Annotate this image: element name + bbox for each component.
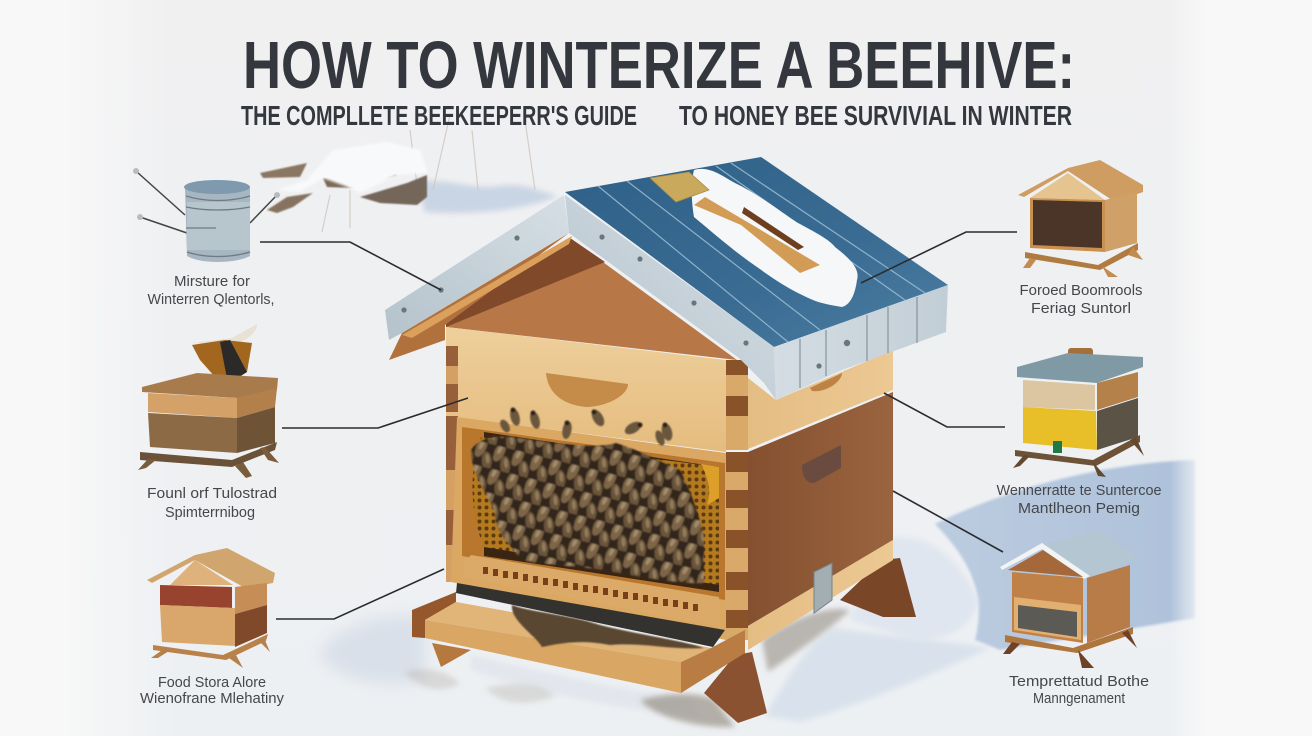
right front leg: [704, 652, 767, 723]
main beehive illustration: [385, 157, 948, 723]
subtitle: THE COMPLLETE BEEKEEPERR'S GUIDE: [241, 100, 637, 131]
icon: top right hive: [1018, 160, 1143, 277]
landing board left edge: [412, 592, 456, 638]
subtitle: [241, 100, 1072, 131]
snow debris around the hive: [405, 609, 850, 727]
label: temperature: [996, 483, 1162, 517]
icon: small hive red band: [147, 548, 275, 668]
label: management: Temprettatud Bothe: [1009, 674, 1149, 690]
label: food storage: Food Stora Alore: [158, 675, 266, 691]
snow on roof: [692, 169, 858, 307]
ridge metal strip: [565, 195, 776, 400]
side lower brown box: [748, 392, 893, 626]
label: temperature: Wennerratte te Suntercoe: [996, 483, 1162, 499]
label: temperature: Mantlheon Pemig: [1018, 501, 1140, 517]
label: top right: Feriag Suntorl: [1031, 301, 1131, 317]
wood soffit: [389, 233, 569, 360]
label: food: [147, 486, 277, 521]
upper front box: [446, 327, 726, 452]
icon: metal can with wires: [133, 168, 280, 262]
side upper pine box: [748, 350, 893, 449]
gable shadow: [446, 238, 605, 327]
label: moisture: Winterren Qlentorls,: [148, 292, 274, 308]
icon: blue roof hive: [1000, 530, 1138, 668]
bee cluster: [471, 407, 704, 583]
left front leg: [432, 643, 471, 667]
frame around opening: [451, 417, 726, 640]
honeycomb: [472, 437, 719, 585]
golden honey patch: [701, 464, 719, 505]
subtitle: TO HONEY BEE SURVIVIAL IN WINTER: [679, 100, 1072, 131]
front hand-hold: [546, 373, 628, 407]
label: management: [1009, 674, 1149, 707]
roof fascia: [774, 285, 948, 400]
entrance reducer dark bar: [456, 583, 725, 647]
title: HOW TO WINTERIZE A BEEHIVE:: [243, 28, 1075, 103]
bees at top of opening: [498, 407, 674, 447]
label: food: Spimterrnibog: [165, 505, 255, 521]
leader lines: [260, 232, 1017, 619]
side bottom pine strip: [748, 540, 893, 650]
landing board front: [425, 620, 681, 693]
wooden feeder bar: [694, 197, 820, 273]
left corner joints: [446, 346, 458, 545]
side hand-hold upper: [810, 373, 842, 391]
rear leg: [840, 558, 916, 617]
landing board top: [425, 602, 711, 662]
side hand-hold lower: [802, 445, 841, 483]
label: management: Manngenament: [1033, 691, 1125, 707]
dark slot in snow: [742, 207, 804, 250]
left roof metal: [385, 195, 569, 340]
label: top right: [1020, 283, 1142, 317]
label: food: Founl orf Tulostrad: [147, 486, 277, 502]
metal latch: [814, 563, 832, 613]
label: top right: Foroed Boomrools: [1020, 283, 1142, 299]
wooden cover block: [650, 172, 709, 202]
roof screws: [401, 234, 850, 369]
right corner post joints: [726, 360, 748, 640]
landing board right end: [681, 630, 745, 693]
bees on landing board: [512, 605, 704, 648]
background rocks with snow: [260, 115, 535, 232]
label: food storage: [140, 675, 285, 707]
label: food storage: Wienofrane Mlehatiny: [140, 691, 285, 707]
bottom slatted rail: [464, 555, 721, 627]
blue roof: [565, 157, 948, 347]
gable: [446, 238, 737, 360]
inner cavity: [462, 427, 725, 600]
icon: yellow hive: [1013, 348, 1144, 477]
label: moisture: [148, 274, 274, 308]
label: moisture: Mirsture for: [174, 274, 250, 290]
icon: hive box with smoker: [138, 324, 279, 478]
